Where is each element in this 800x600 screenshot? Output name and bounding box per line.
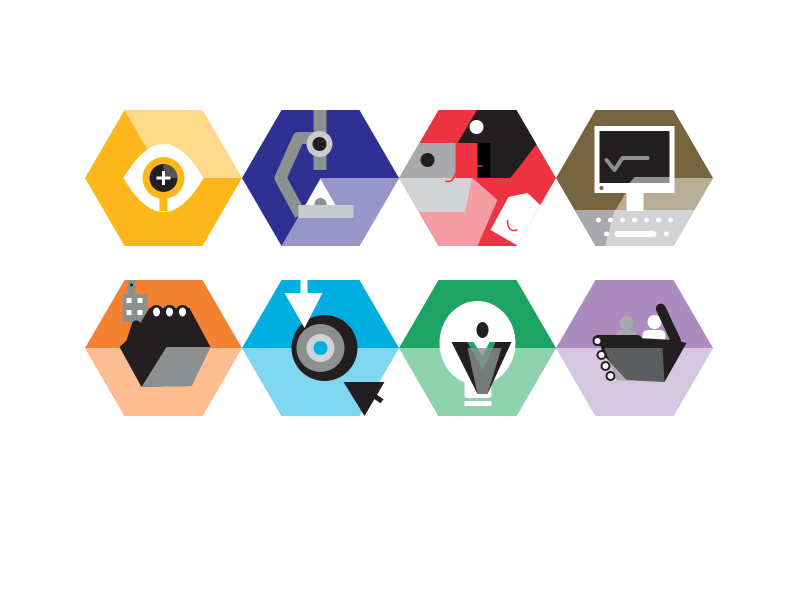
hexagon: light bulb [398, 278, 558, 418]
hexagon: computer [554, 108, 714, 248]
hexagon: eye [84, 108, 244, 248]
hexagon: profile with question [398, 108, 558, 248]
hexagon: microscope [240, 108, 400, 248]
hexagon: target with arrows [240, 278, 400, 418]
hexagon: hand with cube [84, 278, 244, 418]
icon grid [85, 110, 713, 416]
hexagon: hand holding people [554, 278, 714, 418]
